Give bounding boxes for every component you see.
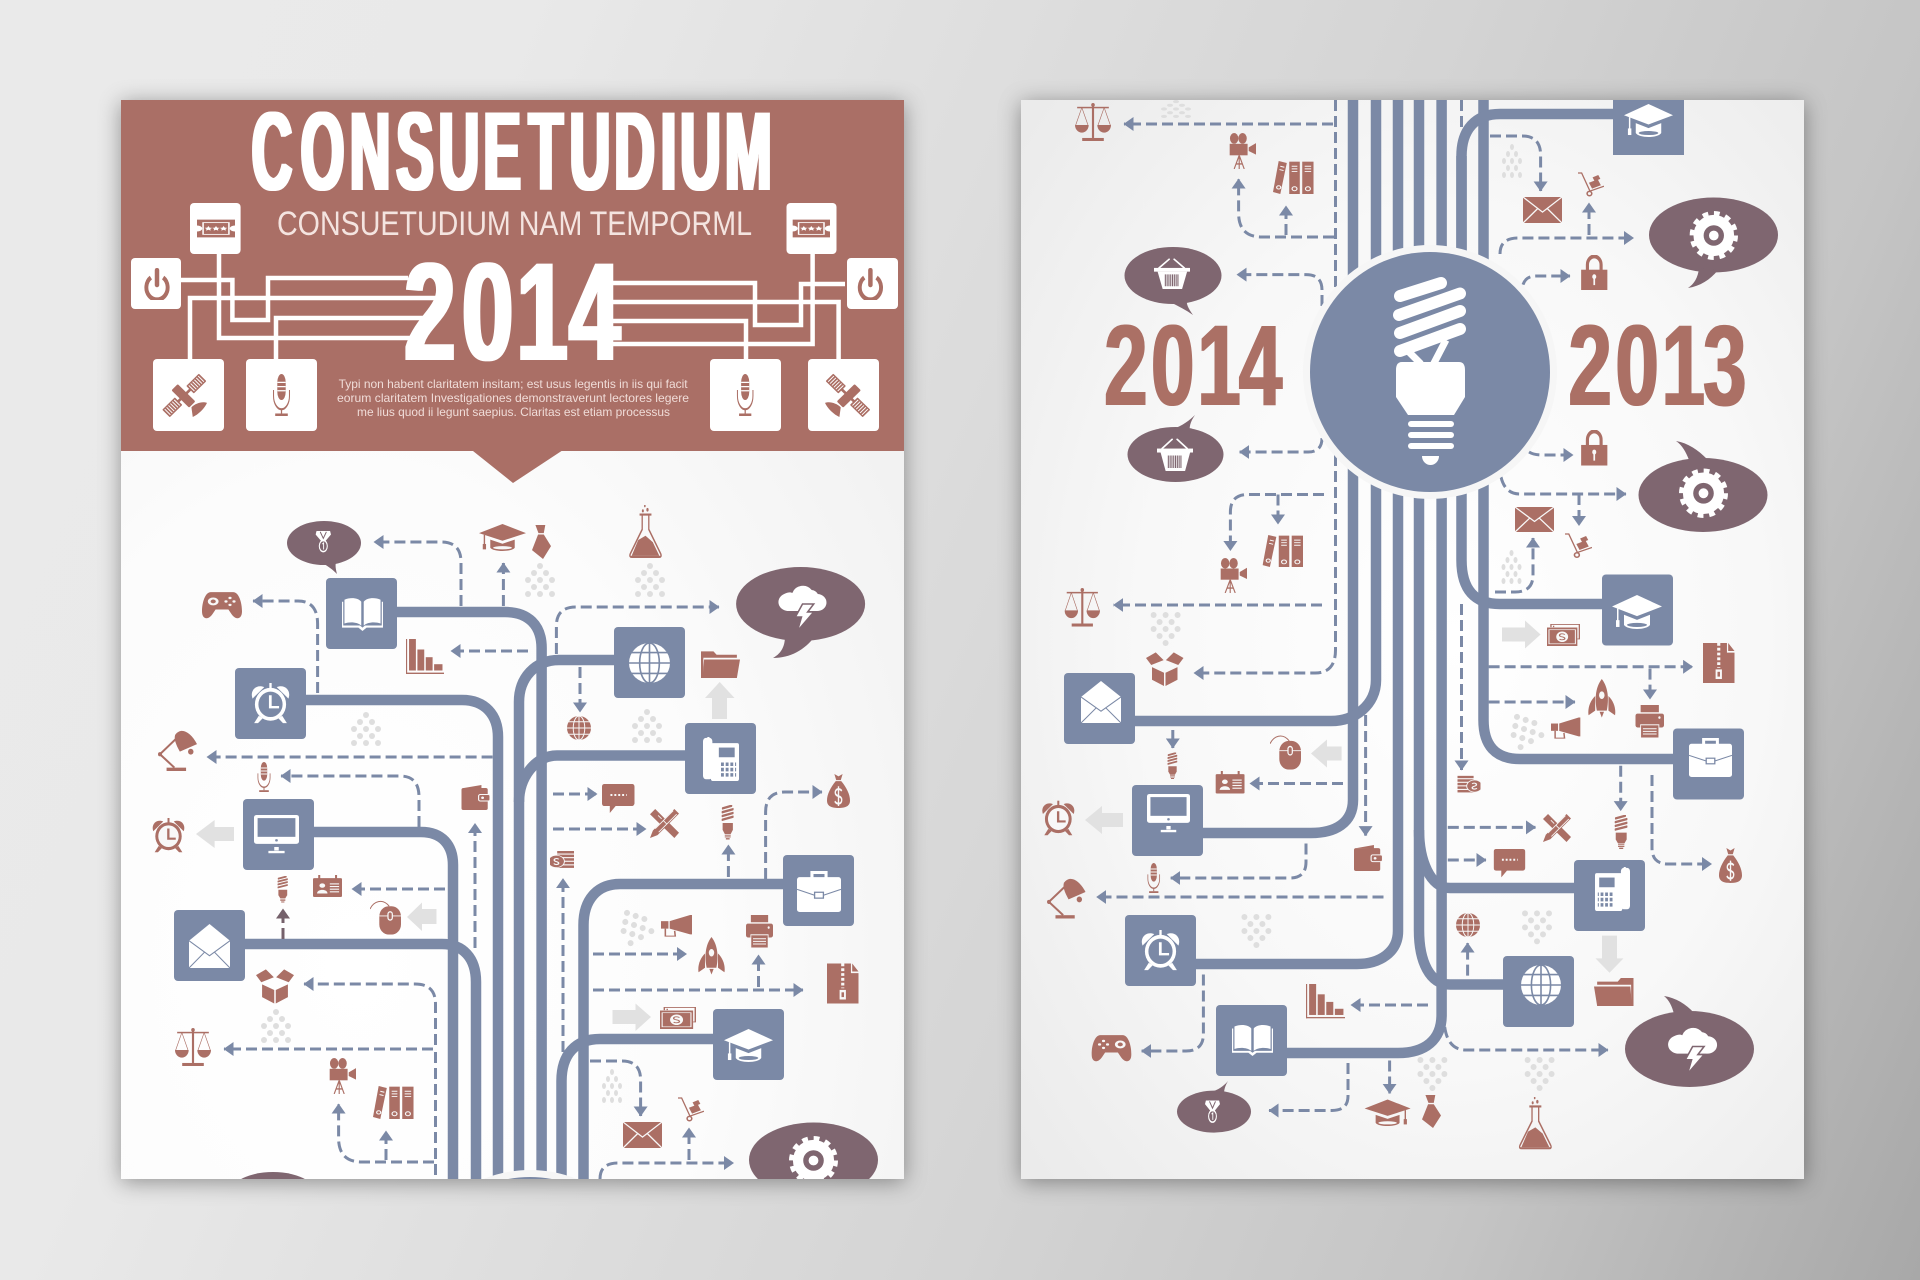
icon: id card: [1216, 771, 1245, 794]
tile: graduation cap top: [1613, 100, 1684, 155]
icon: lamp: [1047, 879, 1086, 918]
arrow to small bulb: [282, 909, 284, 939]
icon: tie: [532, 525, 551, 559]
arrow to coins: [562, 879, 564, 1052]
tile: graduation cap: [713, 1009, 784, 1080]
arrow to box lower: [1194, 455, 1336, 673]
arrow to bulb lower: [1171, 730, 1174, 748]
grey arrow to mouse: [407, 902, 436, 931]
icon: speech: [602, 784, 634, 813]
gear bubble top: [1649, 198, 1778, 288]
gear bubble lower: [1638, 441, 1768, 532]
bulb disc with icon: [1303, 245, 1557, 499]
icon: box: [256, 969, 294, 1004]
icon: megaphone: [661, 915, 692, 936]
arrow to medal bubble: [374, 542, 461, 606]
grey arrow to mouse: [1311, 740, 1342, 768]
icon: gamepad: [1092, 1035, 1131, 1061]
arrow to gear bubble: [600, 1163, 734, 1179]
arrow to gamepad: [253, 601, 318, 693]
connector: globe: [1419, 100, 1503, 984]
arrow to rocket: [593, 952, 686, 956]
year 2013 right: 2013: [1568, 301, 1747, 430]
arrow to envelope top: [1490, 136, 1541, 191]
connector: graduation lower: [1462, 156, 1602, 604]
icon: id card: [313, 875, 342, 897]
arrow to speech lower: [1448, 858, 1486, 862]
icon: bills: [660, 1007, 695, 1029]
connector: monitor: [313, 832, 453, 1179]
arrow to binders lower: [1276, 494, 1280, 524]
icon: speech: [1494, 849, 1525, 877]
arrow to wallet lower: [1364, 715, 1367, 836]
tile: briefcase: [1673, 728, 1744, 800]
body copy: [337, 377, 689, 419]
arrow to box: [304, 984, 436, 1045]
header tile: satellite left: [153, 359, 224, 431]
grey arrow to bills: [1502, 620, 1541, 648]
icon: folder: [701, 651, 740, 678]
arrow to bulb icon lower: [1619, 766, 1622, 811]
icon: energy saving bulb: [1396, 283, 1465, 465]
arrow to gamepad lower: [1142, 974, 1203, 1051]
header tile: satellite right: [808, 359, 879, 431]
arrow to id card: [352, 888, 445, 890]
arrow to coins lower: [1460, 604, 1463, 770]
arrow to money bag lower: [1652, 775, 1712, 864]
icon: balance: [1075, 103, 1111, 141]
basket bubble lower: [1128, 415, 1224, 482]
header tile: microphone right: [710, 359, 781, 431]
arrow to zip file: [593, 988, 803, 992]
icon: microphone: [1148, 863, 1160, 893]
header tile: ticket right: [786, 203, 836, 254]
icon: flask: [1520, 1097, 1551, 1148]
arrow to printer: [757, 955, 760, 987]
arrows above bulb: [1124, 100, 1634, 287]
tile: monitor: [1132, 785, 1203, 856]
bulb disc top: [483, 1170, 577, 1179]
header tile: microphone left: [246, 359, 317, 431]
arrow to pencil lower: [1448, 826, 1536, 829]
grey arrow to bills: [612, 1004, 651, 1031]
tile: globe: [614, 627, 685, 698]
arrow to balance: [224, 1048, 433, 1050]
icon: binders: [1273, 161, 1314, 194]
icon: rocket: [1588, 679, 1615, 718]
icon: envelope lower: [1515, 507, 1554, 532]
year 2014 left: 2014: [1104, 301, 1282, 430]
arrow to lock lower: [1529, 452, 1573, 455]
cloud bubble: [736, 567, 865, 658]
tile: monitor: [243, 799, 314, 870]
header band: [121, 89, 904, 483]
arrow to lamp lower: [1097, 896, 1384, 898]
icon: box: [1146, 652, 1184, 686]
arrow to gear bubble top: [1500, 238, 1634, 254]
arrow to medal lower: [1269, 1063, 1348, 1110]
tile: alarm clock: [1125, 915, 1196, 986]
arrow to bar chart: [451, 650, 528, 652]
icon: bills: [1547, 624, 1579, 646]
icon: graduation cap: [479, 524, 526, 551]
body copy: me lius quod ii legunt saepius. Claritas est etiam processus: [357, 405, 670, 419]
icon: alarm: [1042, 801, 1074, 835]
arrow to wallet: [474, 824, 476, 948]
icon: folder: [1594, 978, 1634, 1006]
dashed line down: [434, 1052, 437, 1179]
arrow to zip lower: [1489, 665, 1693, 668]
connector: monitor: [1203, 100, 1353, 833]
icon: dolly lower: [1565, 534, 1592, 557]
arrow to camera: [339, 1104, 434, 1162]
icon: money bag: [1719, 848, 1742, 883]
grey arrow to alarm: [196, 820, 234, 848]
icon: rocket: [698, 937, 725, 974]
arrow to envelope: [590, 1061, 641, 1116]
body copy: eorum claritatem Investigationes demonstraverunt lectores legere: [337, 391, 689, 405]
connector: envelope: [1134, 100, 1376, 721]
icon: coins: [548, 851, 574, 868]
icon: pencil and ruler: [650, 809, 679, 838]
arrow to dolly lower: [1578, 494, 1580, 526]
connector: globe: [519, 660, 614, 1179]
dot cluster: [1417, 1057, 1447, 1091]
icon: flask: [630, 505, 661, 557]
tile: globe: [1503, 956, 1574, 1027]
icon: gamepad: [202, 592, 242, 618]
body copy: Typi non habent claritatem insitam; est usus legentis in iis qui facit: [339, 377, 688, 391]
icon: coins: [1458, 776, 1482, 792]
icon: microphone: [258, 762, 270, 792]
arrow to basket lower: [1240, 438, 1322, 452]
connector: envelope: [245, 944, 476, 1179]
icon: balance lower: [1065, 588, 1100, 627]
connector: graduation: [562, 1039, 713, 1179]
dot cluster: [602, 1069, 622, 1103]
arrow to speech icon: [553, 792, 597, 796]
arrow to dolly top: [1588, 203, 1590, 235]
connector: phone: [1419, 830, 1574, 888]
arrow to printer lower: [1648, 669, 1652, 699]
arrow to balance lower: [1114, 604, 1322, 606]
connector: alarm: [306, 700, 498, 1179]
cloud bubble lower: [1625, 996, 1754, 1087]
dashed stub top: [1460, 100, 1463, 127]
tile: graduation cap lower: [1602, 574, 1673, 646]
icon: lamp: [158, 731, 197, 771]
dot cluster: [635, 563, 665, 597]
icon: camera: [1230, 133, 1256, 169]
arrow to pencil icon: [553, 828, 646, 830]
medal bubble: [287, 521, 361, 574]
gear bubble: [749, 1122, 878, 1198]
icon: wallet: [1354, 845, 1382, 871]
dot cluster: [525, 563, 555, 597]
arrow to graduation cap lower: [1388, 1060, 1391, 1093]
panel: right poster: [1021, 100, 1804, 1179]
grey arrow to alarm: [1085, 806, 1123, 834]
tile: envelope: [1064, 673, 1135, 744]
dot cluster: [1502, 144, 1522, 178]
icon: printer: [1636, 705, 1664, 738]
year 2014: 2014: [404, 235, 620, 391]
dot cluster: [1522, 910, 1552, 944]
icon: camera lower: [1221, 558, 1247, 593]
header tile: power right: [847, 258, 898, 309]
icon: megaphone: [1551, 718, 1580, 738]
arrow to microphone lower: [1171, 844, 1306, 878]
icon: binders lower: [1263, 535, 1303, 567]
title: CONSUETUDIUM: [252, 89, 772, 214]
icon: alarm: [153, 818, 184, 852]
arrow to camera lower: [1230, 494, 1324, 550]
arrow to bar chart lower: [1351, 1004, 1428, 1006]
subtitle: CONSUETUDIUM NAM TEMPORML: [277, 205, 752, 243]
arrow to id card lower: [1250, 782, 1343, 785]
tree diagram: left poster: [153, 505, 878, 1229]
dot cluster: [613, 903, 655, 947]
basket bubble: [224, 1172, 322, 1229]
arrow to money bag: [766, 792, 822, 879]
icon: wallet: [462, 785, 490, 810]
icon: bulb: [1168, 753, 1177, 779]
dot cluster: [1503, 707, 1545, 751]
icon: bulb: [1615, 816, 1627, 849]
icon: small globe: [567, 716, 591, 740]
arrow to basket top: [1237, 275, 1322, 306]
header connector network: [181, 254, 845, 359]
tree diagram: right poster: [1042, 100, 1778, 1148]
arrow to cloud lower: [1445, 1027, 1608, 1050]
icon: small globe: [1456, 913, 1480, 937]
arrow to camera top: [1239, 179, 1334, 237]
arrow to lamp: [207, 756, 493, 758]
icon: mouse: [1270, 736, 1301, 770]
header tile: power left: [131, 258, 181, 309]
tile: alarm clock: [235, 668, 306, 739]
tile: briefcase: [783, 855, 854, 926]
arrow to small globe: [578, 667, 582, 712]
icon: lock top: [1581, 256, 1607, 290]
arrow to gear lower: [1501, 477, 1626, 494]
connector: book: [397, 612, 542, 1179]
arrow to graduation cap: [502, 563, 505, 606]
connector: alarm: [1196, 100, 1398, 964]
arrow to bulb icon: [727, 845, 730, 877]
icon: pencil and ruler: [1543, 814, 1571, 842]
icon: dolly: [1578, 173, 1604, 196]
icon: bar chart: [406, 639, 444, 674]
arrow to rocket lower: [1489, 700, 1575, 704]
icon: envelope: [623, 1122, 662, 1148]
connector: book: [1287, 100, 1442, 1053]
connector: briefcase: [584, 884, 783, 1179]
connector: phone: [519, 756, 685, 802]
basket bubble top: [1124, 247, 1222, 315]
icon: bulb: [278, 877, 287, 902]
icon: graduation cap: [1365, 1100, 1411, 1126]
arrow to binders top: [1284, 206, 1288, 235]
arrow to binders: [384, 1131, 388, 1160]
dot cluster: [1502, 550, 1522, 584]
icon: balance: [175, 1028, 211, 1066]
icon: money bag: [827, 774, 850, 808]
dot cluster: [261, 1009, 291, 1043]
arrow to dolly: [688, 1128, 690, 1160]
header tile: ticket left: [190, 203, 241, 254]
medal bubble lower: [1177, 1081, 1251, 1133]
icon: binders: [373, 1086, 414, 1119]
dashed line top: [1334, 100, 1337, 287]
dot cluster: [1241, 914, 1271, 948]
icon: bulb: [722, 806, 733, 840]
arrow to small globe lower: [1466, 943, 1469, 976]
arrow to microphone: [281, 776, 419, 827]
icon: mouse: [370, 901, 401, 935]
icon: camera: [330, 1058, 356, 1094]
dot cluster: [351, 712, 381, 746]
dot cluster: [632, 709, 662, 743]
icon: zip file: [1703, 643, 1734, 683]
tile: book: [326, 578, 397, 649]
dot cluster: [1151, 612, 1181, 646]
icon: lock lower: [1581, 431, 1607, 466]
arrow to balance top: [1124, 122, 1333, 126]
icon: tie: [1422, 1095, 1441, 1128]
icon: printer: [746, 915, 773, 948]
grey arrow to folder: [705, 682, 734, 719]
arrow to cloud bubble: [556, 607, 719, 654]
grey arrow to folder: [1596, 936, 1624, 973]
connector: graduation upper: [1462, 114, 1613, 254]
icon: dolly: [678, 1098, 704, 1121]
icon: bar chart: [1306, 984, 1345, 1018]
tile: envelope: [174, 910, 245, 981]
tile: phone: [685, 723, 756, 794]
tile: book: [1216, 1005, 1287, 1076]
arrow to envelope lower: [1495, 538, 1533, 592]
icon: zip file: [827, 964, 858, 1004]
tile: phone: [1574, 860, 1645, 931]
icon: envelope: [1523, 197, 1562, 223]
dot cluster: [1161, 100, 1191, 118]
arrow to lock top: [1523, 276, 1570, 285]
connector: briefcase: [1484, 100, 1673, 759]
dot cluster: [1525, 1057, 1555, 1091]
panel: left poster: [121, 89, 904, 1229]
